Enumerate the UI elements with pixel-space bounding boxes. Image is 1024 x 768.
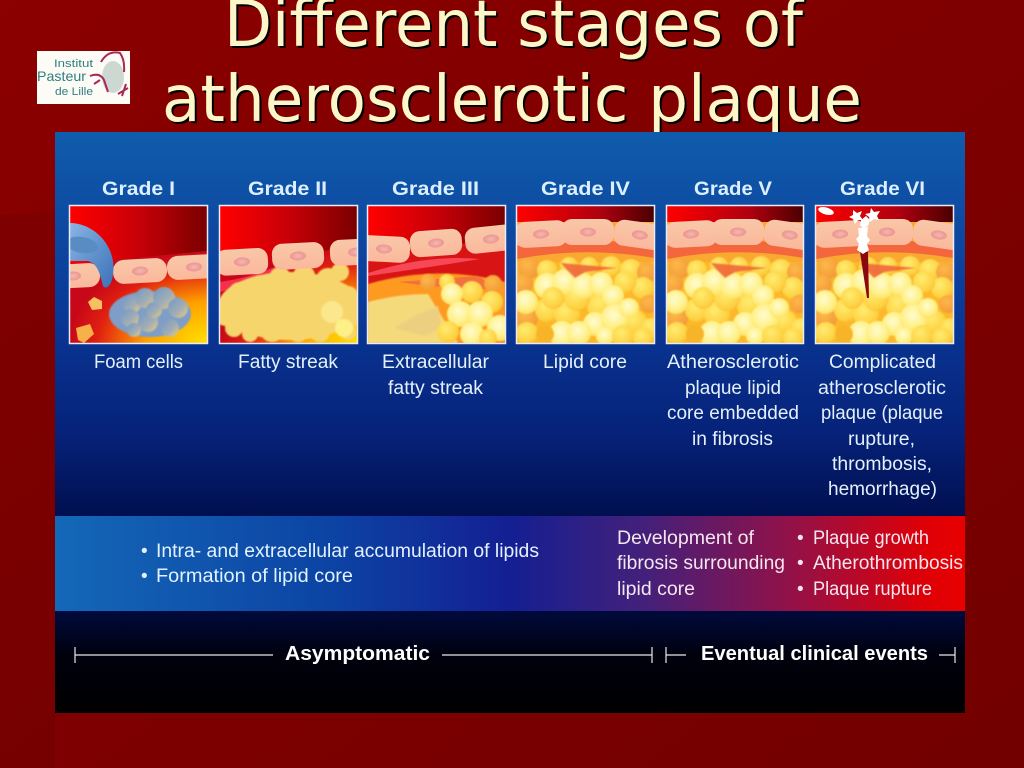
clinical bullets: • [797,528,804,549]
clinical bullets: • [797,553,804,574]
grade headings: Grade VI [840,179,925,200]
fibrosis text: lipid core [617,579,695,600]
illustration: Grade V lipid core in fibrosis [666,204,804,344]
fibrosis text: fibrosis surrounding [617,553,785,574]
grade captions: Extracellular [382,352,490,373]
lipid accumulation bullets: • [141,541,148,562]
clinical bullets: Atherothrombosis [813,553,963,574]
grade captions: Complicated [829,352,936,373]
clinical bullets: • [797,579,804,600]
grade captions: plaque (plaque [821,403,943,424]
lipid accumulation bullets: Intra- and extracellular accumulation of lipids [156,541,539,562]
timeline strip [55,611,965,713]
illustration: Grade I foam cells [68,204,208,344]
fibrosis text: Development of [617,528,755,549]
title: atherosclerotic plaque [162,63,862,137]
grade captions: hemorrhage) [828,479,937,500]
clinical bullets [797,528,963,600]
illustration: Grade III extracellular fatty streak [366,204,506,344]
grade captions: Foam cells [94,352,183,373]
illustration: Grade IV lipid core [516,204,656,344]
grade headings: Grade I [102,179,175,200]
illustration: Grade VI complicated plaque [814,204,954,344]
clinical bullets: Plaque growth [813,528,929,549]
logo: Institut Pasteur de Lille: de Lille [55,86,93,98]
grade headings: Grade II [248,179,327,200]
grade captions: rupture, [848,429,915,450]
grade captions: core embedded [667,403,799,424]
title [162,0,862,137]
lipid accumulation bullets: • [141,566,148,587]
gradient band: pathology descriptions [55,516,965,611]
grade captions: fatty streak [388,378,484,399]
grade captions: Atherosclerotic [667,352,799,373]
fibrosis text [617,528,785,600]
arrow: asymptomatic span [75,643,652,665]
grade headings: Grade III [392,179,479,200]
grade captions: Fatty streak [238,352,339,373]
grade captions: thrombosis, [832,454,932,475]
grade captions: atherosclerotic [818,378,946,399]
grade headings: Grade IV [541,179,630,200]
grade headings: Grade V [694,179,772,200]
main panel [45,132,966,516]
logo: Institut Pasteur de Lille: Pasteur [37,68,86,84]
illustration: Grade II fatty streak [218,204,358,344]
arrow: eventual clinical events span: Eventual clinical events [701,643,928,665]
grade captions: Lipid core [543,352,627,373]
lipid accumulation bullets [141,541,539,587]
logo: Institut Pasteur de Lille [37,51,130,104]
grade captions [94,352,946,500]
logo: Institut Pasteur de Lille: Institut [54,58,93,70]
arrow: asymptomatic span: Asymptomatic [285,643,430,665]
lipid accumulation bullets: Formation of lipid core [156,566,353,587]
grade captions: in fibrosis [692,429,773,450]
grade captions: plaque lipid [685,378,781,399]
clinical bullets: Plaque rupture [813,579,932,600]
grade headings [102,179,925,200]
